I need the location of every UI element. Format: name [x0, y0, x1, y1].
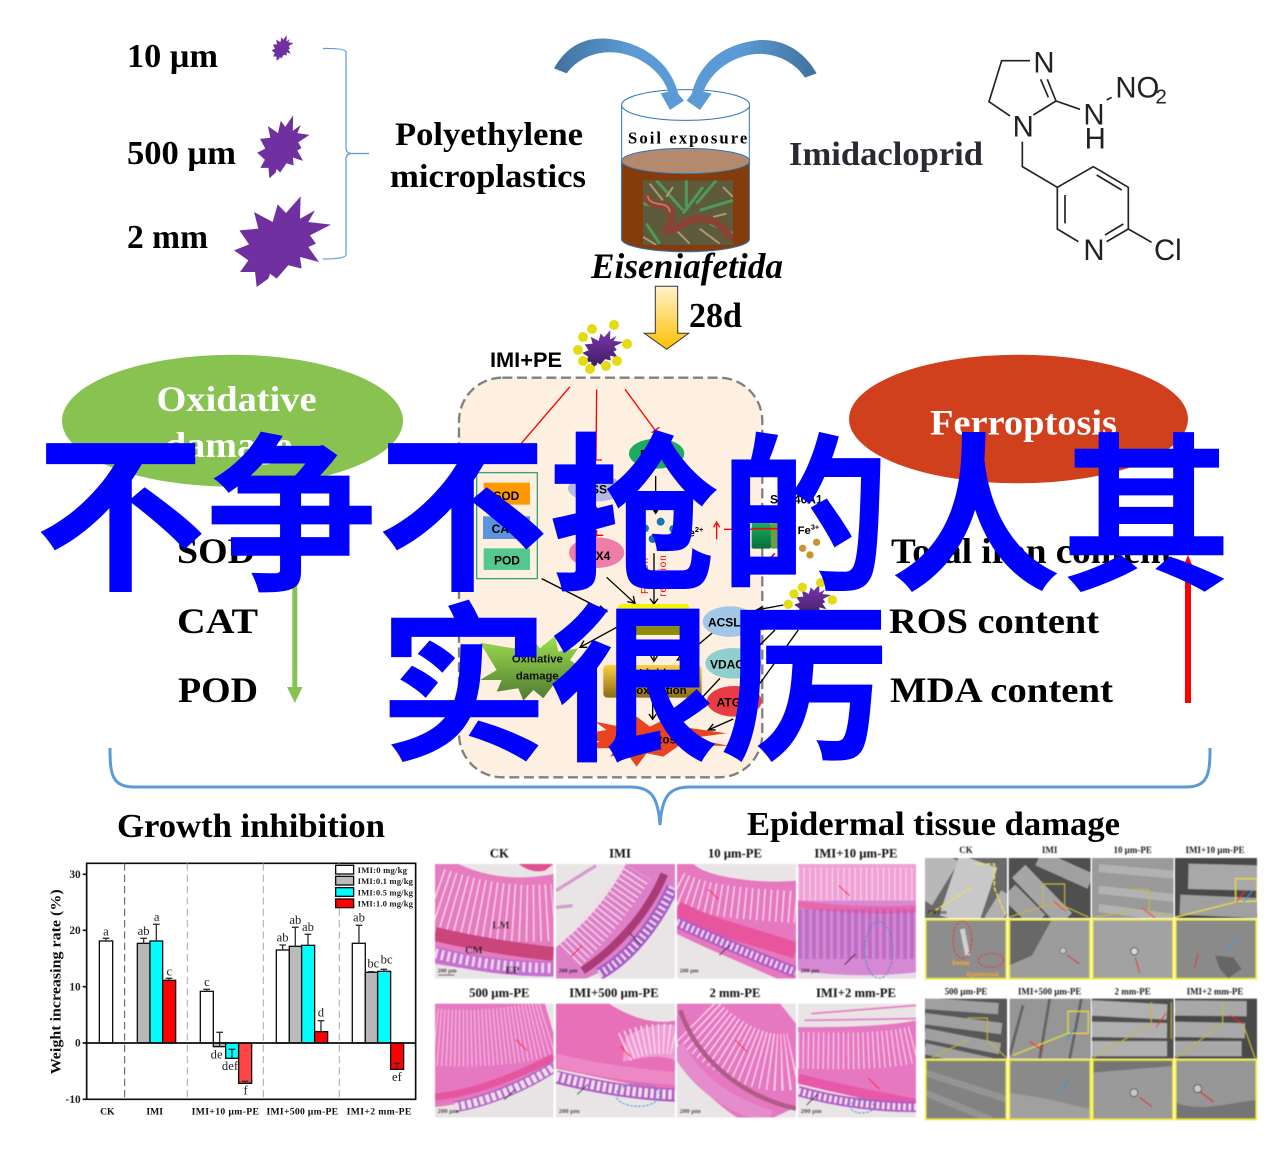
channel: SLC40A1 [752, 492, 823, 560]
chemical structure of imidacloprid [989, 46, 1182, 267]
chemical structure of imidacloprid: N [1083, 99, 1105, 132]
histology: IMI: 200 µm [559, 968, 578, 974]
burst: ferroptosis: Ferroptosis [620, 732, 687, 746]
significance letters: ef [392, 1070, 403, 1084]
icon: particle near membrane [784, 578, 837, 620]
node: lipid peroxidation [603, 665, 702, 698]
heading: polyethylene microplastics: Polyethylene [395, 117, 583, 153]
panel titles [469, 847, 897, 1000]
overlay headline text [35, 423, 1232, 784]
y axis tick labels: -10 [66, 1094, 81, 1106]
panel: SEM epidermis images [915, 845, 1257, 1120]
burst: oxidative damage [480, 636, 582, 701]
panel titles: 500 µm-PE [469, 986, 530, 1000]
SEM: CK detail: Setae [952, 960, 970, 967]
ellipse: ferroptosis: Ferroptosis [930, 402, 1117, 442]
panel titles: CK [959, 845, 973, 855]
histology: 2 mm-PE: 200 µm [680, 1108, 701, 1115]
node: ATG [707, 686, 762, 717]
significance letters: f [244, 1083, 249, 1097]
x axis labels: CK [100, 1107, 115, 1118]
oxidative markers list: SOD [177, 531, 255, 571]
histology: 10 µm-PE [676, 863, 797, 980]
exposure arrow: microplastics [554, 39, 684, 110]
ellipse: oxidative damage [62, 355, 403, 487]
histology: 500 µm-PE: 200 µm [438, 1108, 459, 1115]
oxidative markers list: CAT [177, 601, 258, 641]
significance letters: d [318, 1006, 325, 1020]
ellipse: oxidative damage: damage [165, 425, 292, 465]
flow arrows [542, 553, 798, 730]
node: ACSL4 [703, 606, 757, 637]
SEM: 500 µm-PE overview [924, 998, 1008, 1060]
histology: CK [434, 863, 554, 979]
significance letters: bc [381, 952, 393, 966]
node: GSS: GSS [582, 482, 607, 496]
node: GPX4: GPX4 [578, 549, 611, 563]
panel: histology sections [435, 847, 916, 1118]
particle size labels: 2 mm [127, 219, 208, 256]
y axis tick labels: 20 [69, 925, 81, 937]
ellipse: oxidative damage: Oxidative [156, 379, 317, 419]
SEM: IMI+500 µm-PE detail [1008, 1058, 1092, 1121]
y axis title: Weight increasing rate (%) [49, 889, 65, 1074]
axis frame and ticks [83, 863, 416, 1099]
significance letters: a [103, 925, 109, 939]
species label: Eiseniafetida [590, 246, 783, 286]
icon: 10 µm particle [272, 35, 293, 61]
channel: SLC40A1: SLC40A1 [770, 492, 823, 506]
panel titles [945, 845, 1244, 996]
error bars [103, 924, 400, 1083]
histology: 10 µm-PE: 200 µm [680, 968, 699, 974]
SEM: CK detail [924, 918, 1008, 980]
size bracket [323, 48, 369, 259]
panel titles: IMI+500 µm-PE [1018, 986, 1081, 996]
label: IMI+PE: IMI+PE [490, 349, 562, 372]
significance letters: c [204, 975, 210, 989]
oxidative markers list [177, 531, 258, 710]
node: FTH: FTH1 [640, 448, 670, 462]
group dividers [123, 863, 126, 1099]
iron: Fe3+: Fe [798, 525, 811, 537]
SEM: 2 mm-PE overview [1091, 998, 1174, 1060]
bars [99, 941, 404, 1083]
panel titles: 2 mm-PE [1115, 986, 1151, 996]
exposure arrow: imidacloprid [687, 40, 817, 110]
box: antioxidant enzymes [477, 473, 537, 579]
iron: Fe3+ [798, 522, 820, 559]
legend: IMI:1.0 mg/kg [358, 899, 414, 909]
iron: Fe3+: 3+ [811, 522, 819, 531]
x axis labels [100, 1107, 411, 1118]
significance letters: c [167, 964, 173, 978]
bar chart: weight increasing rate [49, 863, 416, 1118]
box: antioxidant enzymes: POD [494, 553, 520, 567]
significance letters [103, 910, 403, 1097]
histology: IMI+10 µm-PE: 200 µm [801, 968, 820, 974]
particle size labels: 500 µm [127, 135, 236, 172]
panel titles: IMI+10 µm-PE [814, 847, 897, 861]
arrow: 28 day exposure [644, 286, 689, 349]
large bracket joining results [110, 748, 1210, 825]
heading: growth inhibition: Growth inhibition [117, 808, 385, 845]
node: GPX4 [569, 537, 624, 568]
burst: oxidative damage: Oxidative [512, 654, 563, 666]
histology: CK: 200 µm [438, 968, 457, 974]
y axis tick labels: 0 [75, 1038, 81, 1050]
oxidative markers list: POD [178, 670, 258, 710]
jar glass [622, 105, 749, 240]
overlay headline text: 实很厉 [378, 593, 891, 784]
panel titles: 10 µm-PE [708, 847, 762, 861]
node: VDAC [705, 648, 761, 679]
panel titles: IMI+10 µm-PE [1185, 845, 1244, 855]
SEM: CK overview [924, 857, 1008, 919]
arrow: markers increase [1181, 555, 1195, 703]
significance letters: ab [277, 931, 289, 945]
lipid membrane box [618, 604, 689, 635]
panel titles: 500 µm-PE [945, 986, 987, 996]
chemical structure of imidacloprid: 2 [1155, 85, 1167, 108]
histology: 2 mm-PE [676, 1003, 797, 1118]
histology: CK: CM [465, 945, 483, 956]
overlay headline text: 不争不抢的人其 [35, 423, 1232, 614]
icon: 2 mm particle [234, 196, 331, 287]
histology: IMI+10 µm-PE [797, 864, 917, 980]
chemical structure of imidacloprid: NO [1115, 71, 1159, 104]
panel: mechanism in the earthworm cell [459, 320, 837, 777]
significance letters: def [222, 1059, 239, 1073]
histology: CK: LM [492, 920, 509, 931]
SEM: 2 mm-PE detail [1091, 1058, 1174, 1121]
SEM: CK overview: 500 µm [928, 910, 947, 916]
y axis tick labels: 10 [69, 981, 81, 993]
panel titles: IMI+500 µm-PE [569, 986, 659, 1000]
burst: oxidative damage: damage [516, 670, 559, 682]
ellipse: ferroptosis [849, 355, 1188, 483]
y axis tick labels [66, 869, 81, 1106]
ferroptosis markers list: MDA content [890, 670, 1113, 710]
node: ATG: ATG5 [717, 696, 748, 710]
histology: CK: EP [506, 965, 520, 976]
node: lipid peroxidation: peroxidation [619, 685, 687, 697]
legend: IMI:0 mg/kg [358, 865, 408, 875]
SEM: IMI detail [1008, 918, 1092, 980]
SEM: IMI+2 mm-PE overview [1174, 998, 1258, 1060]
ferroptosis markers list [889, 531, 1173, 710]
inhibition lines [520, 387, 659, 537]
iron release [641, 476, 781, 543]
chemical structure of imidacloprid: H [1085, 123, 1106, 156]
ferroptosis markers list: ROS content [889, 601, 1099, 641]
heading: polyethylene microplastics [390, 117, 586, 195]
panel titles: 10 µm-PE [1113, 845, 1152, 855]
panel titles: IMI [1042, 845, 1058, 855]
chemical structure of imidacloprid: N [1083, 234, 1105, 267]
panel titles: CK [490, 847, 509, 861]
x axis labels: IMI+500 µm-PE [266, 1107, 338, 1118]
particle size labels [127, 38, 236, 256]
node: FTH [629, 439, 684, 469]
node: GSS [568, 475, 623, 502]
SEM: IMI+500 µm-PE overview [1009, 998, 1092, 1060]
label: Fenton reaction: reaction [658, 555, 669, 597]
SEM: 500 µm-PE detail [924, 1058, 1008, 1121]
burst: ferroptosis [577, 717, 730, 767]
SEM: IMI+10 µm-PE overview [1174, 857, 1258, 919]
panel titles: IMI+2 mm-PE [1187, 986, 1243, 996]
SEM: 10 µm-PE overview [1091, 858, 1174, 919]
box: antioxidant enzymes: CAT [492, 522, 516, 536]
arrow: markers decrease [287, 560, 302, 703]
legend: IMI:0.5 mg/kg [358, 887, 414, 897]
iron release: Fe [682, 528, 695, 540]
box: antioxidant enzymes: SOD [493, 489, 520, 503]
significance letters: ab [138, 924, 150, 938]
histology: IMI+2 mm-PE [797, 1004, 917, 1118]
soil body [622, 161, 749, 252]
panel titles: IMI [609, 847, 631, 861]
icon: 500 µm particle [257, 115, 310, 178]
significance letters: de [211, 1048, 223, 1062]
label: soil exposure: Soil exposure [628, 129, 747, 148]
label: Imidacloprid: Imidacloprid [789, 136, 983, 173]
panel titles: IMI+2 mm-PE [816, 986, 896, 1000]
histology: IMI+500 µm-PE [555, 1003, 676, 1118]
heading: polyethylene microplastics: microplastics [390, 159, 586, 195]
particle size labels: 10 µm [127, 38, 218, 75]
histology: IMI+500 µm-PE: 200 µm [559, 1108, 580, 1115]
legend [336, 865, 414, 909]
SEM: IMI overview [1008, 857, 1092, 919]
label: 28d: 28d [689, 296, 743, 335]
chemical structure of imidacloprid: N [1013, 110, 1034, 143]
node: VDAC: VDAC [710, 658, 744, 672]
SEM: 10 µm-PE detail [1091, 918, 1174, 980]
node: lipid peroxidation: Lipid [639, 668, 666, 680]
soil exposure jar with earthworm [554, 39, 817, 252]
chemical structure of imidacloprid: Cl [1154, 234, 1182, 267]
histology: IMI+2 mm-PE: 200 µm [801, 1108, 822, 1115]
legend: IMI:0.1 mg/kg [358, 876, 414, 886]
label: Fenton reaction: Fenton [640, 558, 651, 594]
icon: particle with adsorbed IMI [573, 320, 632, 374]
iron release: 2+ [695, 525, 703, 534]
ferroptosis markers list: Total iron content [891, 531, 1173, 571]
significance letters: ab [353, 911, 365, 925]
x axis labels: IMI+2 mm-PE [347, 1107, 411, 1118]
histology: IMI [555, 863, 676, 980]
significance letters: ab [289, 913, 301, 927]
SEM: IMI+2 mm-PE detail [1174, 1058, 1258, 1121]
histology: 500 µm-PE [434, 1003, 554, 1118]
x axis labels: IMI+10 µm-PE [192, 1107, 259, 1118]
panel titles: 2 mm-PE [709, 986, 760, 1000]
heading: epidermal tissue damage: Epidermal tissue damage [747, 806, 1120, 843]
significance letters: a [154, 910, 160, 924]
x axis labels: IMI [146, 1107, 163, 1118]
node: ACSL4: ACSL4 [708, 616, 748, 630]
significance letters: bc [367, 956, 380, 970]
significance letters: ab [302, 920, 314, 934]
SEM: IMI+10 µm-PE detail [1174, 918, 1258, 980]
y axis tick labels: 30 [69, 869, 81, 881]
label: Fenton reaction [640, 555, 669, 597]
SEM: CK detail: Epidermal [967, 971, 999, 978]
chemical structure of imidacloprid: N [1033, 46, 1055, 79]
earthworm photo [643, 180, 733, 245]
